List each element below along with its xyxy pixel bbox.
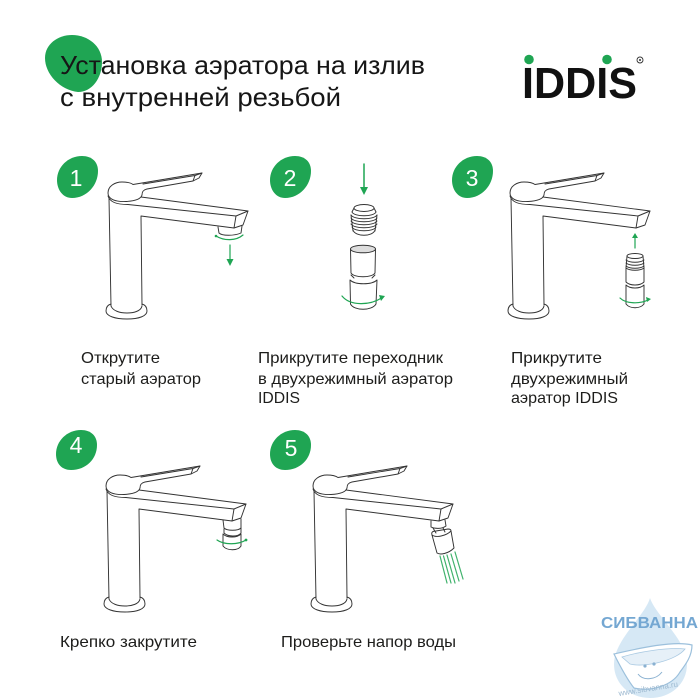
caption 1: старый аэратор: [81, 371, 201, 388]
caption 1: Открутите: [81, 350, 160, 367]
faucet: [508, 173, 650, 319]
badge 3: [452, 156, 493, 198]
aerator with adapter: [626, 254, 644, 308]
down arrow: [360, 164, 368, 195]
step 5: [270, 430, 463, 651]
badge 3: 3: [466, 165, 478, 191]
badge 4: 4: [70, 432, 83, 458]
title: Установка аэратора на излив: [60, 50, 425, 80]
badge 2: [270, 156, 311, 198]
title blob: [45, 35, 102, 92]
up arrow: [632, 233, 638, 248]
badge 4: [56, 430, 97, 470]
logo: IDDIS: IDDIS: [522, 60, 637, 108]
water drop: [614, 598, 687, 698]
caption 2: IDDIS: [258, 390, 300, 407]
faucet: [104, 466, 246, 612]
rotation and down arrow: [215, 235, 243, 266]
rotation arrow: [342, 295, 385, 304]
website: www.sibvanna.ru: [617, 680, 679, 698]
caption 3: аэратор IDDIS: [511, 390, 618, 407]
caption 4: Крепко закрутите: [60, 634, 197, 651]
step 1: [57, 156, 248, 388]
step 2: [258, 156, 453, 407]
step 3: [452, 156, 651, 407]
watermark: [601, 598, 698, 698]
dual-mode aerator: [350, 245, 377, 309]
rotation arrow: [217, 539, 247, 544]
faucet: [311, 466, 453, 612]
fitted aerator: [223, 519, 241, 550]
caption 3: Прикрутите: [511, 350, 602, 367]
caption 2: Прикрутите переходник: [258, 350, 443, 367]
title: [60, 50, 425, 112]
caption 5: Проверьте напор воды: [281, 634, 456, 651]
badge 5: [270, 430, 311, 470]
step 4: [56, 430, 247, 651]
caption 3: двухрежимный: [511, 371, 628, 388]
badge 2: 2: [284, 165, 296, 191]
badge 1: [57, 156, 98, 198]
rotation arrow: [620, 297, 651, 303]
caption 1: [81, 350, 201, 388]
title: с внутренней резьбой: [60, 82, 341, 112]
brand name: СИБВАННА: [601, 615, 698, 632]
bathtub: [614, 644, 692, 689]
water streams: [440, 552, 463, 583]
tilted aerator: [431, 520, 454, 554]
smile: [638, 662, 662, 679]
faucet with old aerator: [106, 173, 248, 319]
badge 1: 1: [70, 165, 82, 191]
caption 2: [258, 350, 453, 407]
caption 2: в двухрежимный аэратор: [258, 371, 453, 388]
badge 5: 5: [285, 435, 297, 461]
adapter: [351, 204, 377, 235]
caption 3: [511, 350, 628, 407]
